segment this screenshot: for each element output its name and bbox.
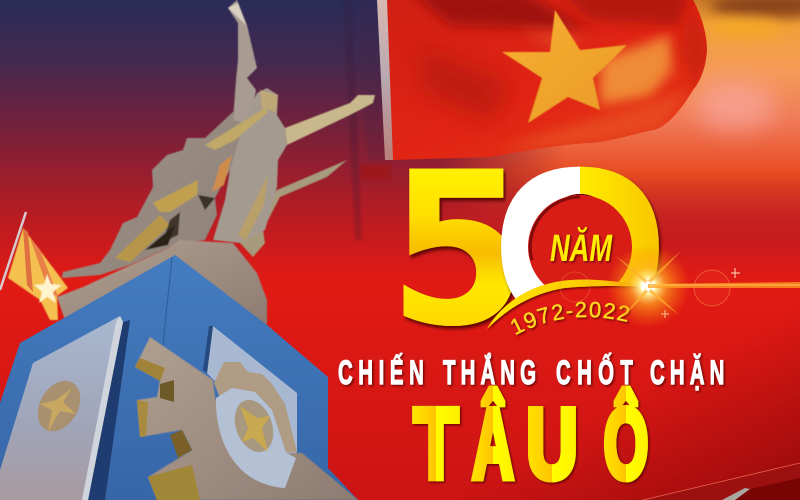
stone base bbox=[57, 240, 267, 325]
subtitle bbox=[338, 352, 724, 391]
digit 0 bbox=[500, 166, 663, 300]
right star medallion bbox=[228, 394, 280, 458]
disc bbox=[216, 388, 296, 488]
right panel bbox=[207, 326, 297, 465]
word: CHỐT: CHỐT bbox=[556, 352, 633, 391]
gear relief bbox=[135, 337, 358, 500]
label: NĂM: NĂM bbox=[550, 226, 613, 270]
letter Â: Â bbox=[472, 389, 514, 500]
sparkle bbox=[560, 244, 800, 328]
word: CHẶN: CHẶN bbox=[650, 354, 724, 391]
main title: TÂU Ô bbox=[414, 389, 648, 500]
kneeling figure bbox=[62, 110, 250, 278]
monument bbox=[0, 0, 375, 500]
gold highlights bbox=[153, 180, 198, 212]
Vietnamese flag bbox=[377, 0, 720, 165]
digit 0: 0 bbox=[489, 128, 671, 375]
blue plinth bbox=[0, 255, 358, 500]
swoosh bbox=[487, 280, 652, 329]
word: CHIẾN: CHIẾN bbox=[338, 354, 424, 391]
flag star bbox=[502, 10, 627, 123]
letter Ô: Ô bbox=[604, 389, 648, 500]
plinth corner edge bbox=[163, 257, 172, 345]
heading: 50 bbox=[403, 166, 663, 332]
flag cloth bbox=[380, 0, 720, 165]
standing figure bbox=[213, 88, 287, 243]
statue group bbox=[62, 0, 375, 278]
raised arm bbox=[228, 0, 257, 125]
letter U: U bbox=[526, 390, 578, 500]
years on arc: 1972-2022 bbox=[511, 302, 632, 338]
gear teeth bbox=[214, 362, 297, 452]
word: THẮNG: THẮNG bbox=[443, 354, 536, 391]
left star medallion bbox=[29, 373, 89, 439]
sunset sky bbox=[440, 0, 800, 240]
left panel bbox=[0, 316, 130, 500]
outstretched arm bbox=[285, 95, 375, 145]
inner shadow of ring bbox=[530, 197, 580, 260]
shadow gap bbox=[145, 225, 175, 250]
bayonet bbox=[240, 160, 347, 257]
digit 5: 5 bbox=[388, 126, 528, 373]
letter T: T bbox=[414, 390, 458, 500]
corner fold bbox=[643, 463, 800, 500]
flag pole bbox=[343, 0, 390, 240]
bottom right shading bbox=[400, 280, 800, 500]
small flag bbox=[0, 212, 68, 320]
hoist strip bbox=[377, 0, 395, 160]
